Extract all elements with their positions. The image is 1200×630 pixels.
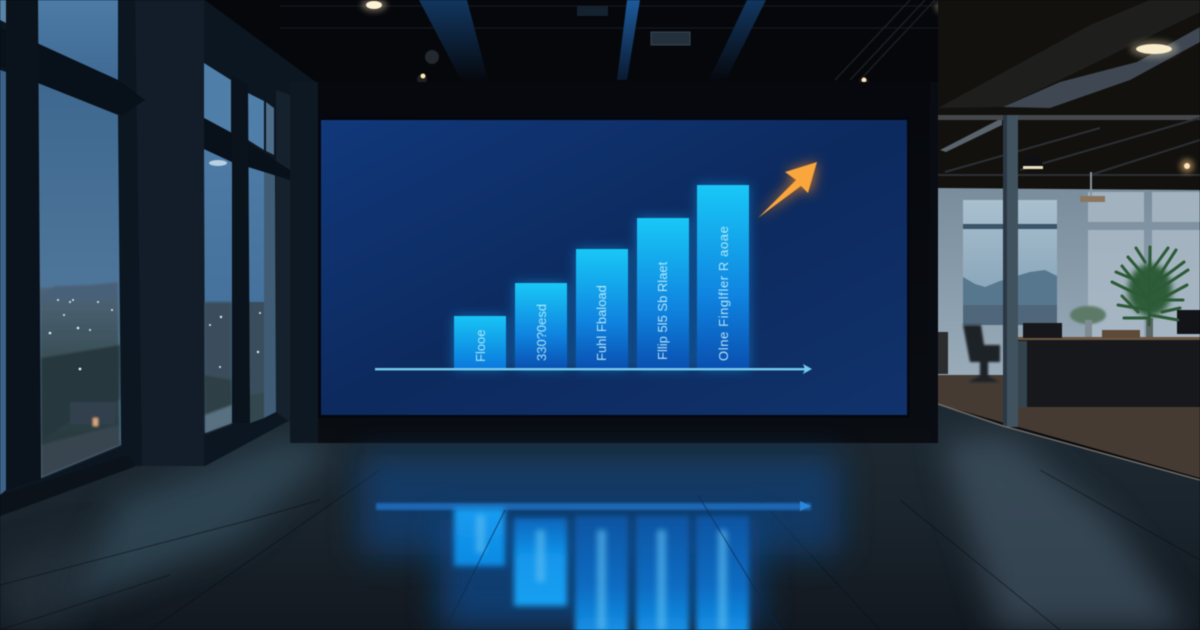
window frame bars: [0, 28, 145, 115]
bar 5: Olne Finglfler R aoae: [716, 226, 731, 361]
monitor: [1177, 310, 1200, 334]
floor reflection of chart: [360, 455, 840, 630]
window pane middle: [204, 149, 232, 433]
right office room: [930, 0, 1200, 480]
left window wall: [0, 0, 320, 516]
glass partition column: [1003, 115, 1018, 427]
growth arrow: [758, 162, 817, 218]
bar chart: [375, 185, 812, 374]
ceiling light room: [1130, 40, 1178, 58]
window pane large: [38, 83, 121, 478]
back wall: [938, 188, 1200, 378]
bar 1: [454, 316, 506, 369]
bar 5: [697, 185, 749, 369]
room ceiling: [938, 0, 1200, 190]
tall plant: [1112, 247, 1188, 337]
corner wall edge: [930, 82, 938, 443]
window pane upper left: [37, 0, 118, 80]
display screen panel: [318, 117, 910, 418]
bar 3: [576, 249, 628, 369]
small plant: [1070, 306, 1106, 337]
ceiling spot light 2: [935, 0, 967, 15]
bar 1: Flooe: [473, 329, 488, 362]
partition base line: [938, 404, 1200, 480]
bar glow: [454, 185, 749, 369]
structural column: [135, 0, 204, 466]
floor window reflections: [60, 440, 340, 610]
ceiling duct centre: [617, 0, 640, 80]
pendant lamps: [1022, 155, 1044, 169]
floor: [0, 404, 1200, 630]
ceiling vent: [651, 32, 690, 45]
bar 4: Fllip 5l5 Sb Rlaet: [655, 261, 670, 360]
window pane right: [248, 163, 276, 423]
ceiling beam right: [709, 0, 766, 80]
bar 2: [515, 283, 567, 369]
bar 4: [637, 218, 689, 369]
wall behind the display: [290, 82, 938, 443]
laptop: [1023, 323, 1062, 338]
track light right: [859, 78, 869, 88]
desk: [1017, 337, 1200, 407]
bar 3: Fuhl Fbaload: [594, 285, 609, 361]
bar 2: 330?0esd: [534, 304, 549, 361]
outdoor window: [963, 200, 1057, 325]
ceiling spot light 1: [361, 0, 387, 12]
ceiling beam left: [419, 0, 488, 80]
desk box: [1102, 330, 1140, 338]
track light left: [417, 50, 439, 84]
office chair: [963, 325, 1000, 382]
axis arrow: [375, 364, 812, 374]
carpet: [938, 375, 1200, 478]
window panes middle upper: [204, 63, 231, 133]
frosted panels: [1088, 192, 1200, 338]
window pane far left: [0, 70, 6, 495]
